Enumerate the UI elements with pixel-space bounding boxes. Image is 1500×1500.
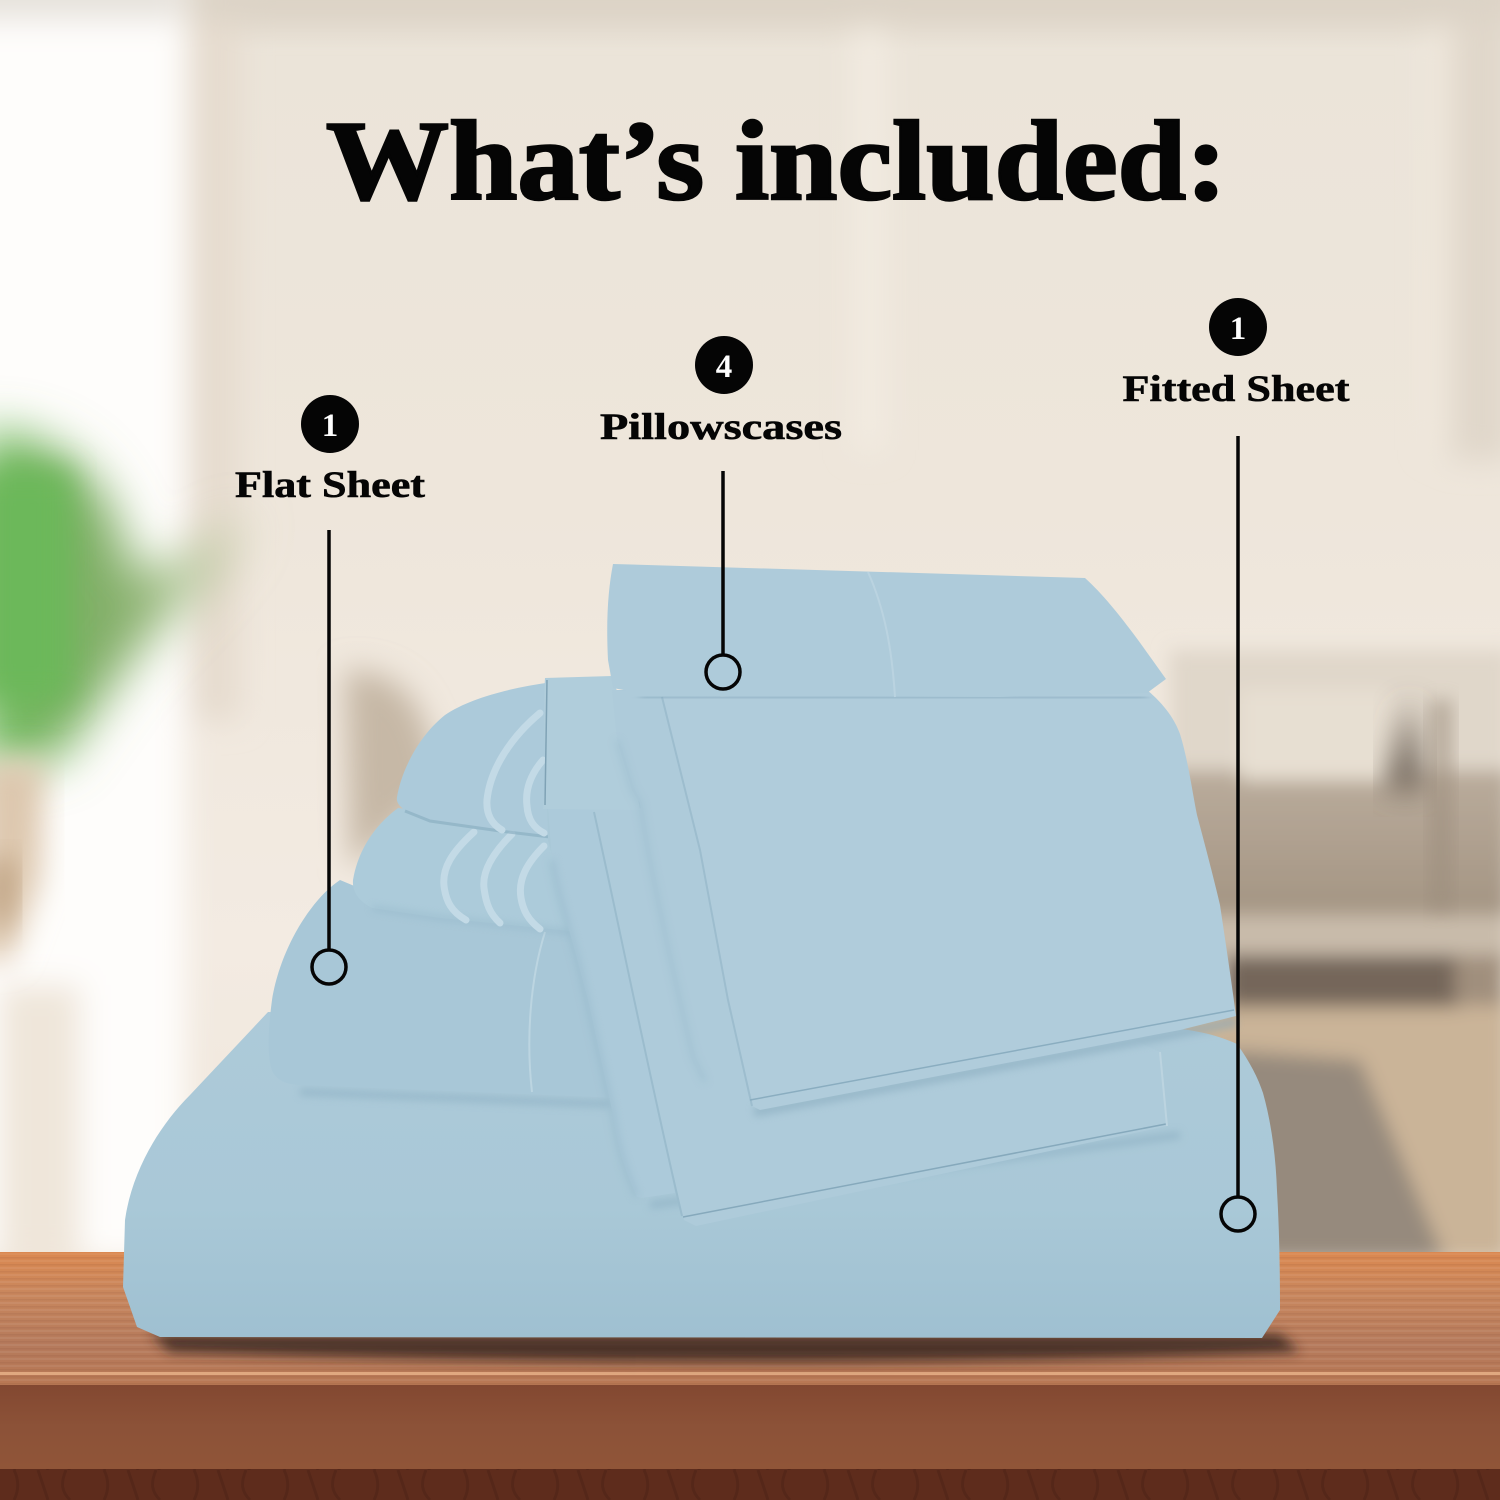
top pillowcase seam <box>868 572 895 697</box>
folded pillowcase: upper back strip <box>612 690 770 1082</box>
flat sheet seam <box>529 932 545 1092</box>
pillowcase roll: lower <box>353 808 580 932</box>
badge: 1: 1 <box>1230 311 1246 347</box>
top pillowcase shadow <box>640 697 1147 698</box>
title: What’s included: <box>326 99 1227 224</box>
sheet contact shadow <box>150 1334 1300 1362</box>
top pillowcase <box>607 564 1166 697</box>
badge: 1 <box>1209 298 1267 356</box>
table apron <box>0 1469 1500 1500</box>
badge: 4 <box>695 336 753 394</box>
table edge <box>0 1385 1500 1469</box>
blurred sofa right <box>1170 650 1500 1260</box>
bedding stack <box>123 564 1280 1338</box>
folded pillowcase: upper front <box>662 690 1236 1110</box>
badge: 1: 1 <box>322 408 338 444</box>
folded pillowcase: lower front <box>594 808 1167 1226</box>
callout: pillowcases <box>600 336 842 689</box>
badge: 1 <box>301 395 359 453</box>
label: pillowcases: Pillowscases <box>600 407 842 448</box>
badge: 4: 4 <box>716 349 732 385</box>
wooden table <box>0 1252 1500 1500</box>
callout: flat sheet <box>235 395 426 984</box>
pointer line: pillowcases <box>706 471 740 689</box>
stack filler behind folds <box>545 690 720 1190</box>
flat sheet <box>269 880 620 1098</box>
pillowcase roll: upper <box>397 682 560 837</box>
label: fitted sheet: Fitted Sheet <box>1122 369 1350 410</box>
folded pillowcase: upper front shadow <box>754 1022 1236 1112</box>
fitted sheet <box>123 1012 1280 1338</box>
label: flat sheet: Flat Sheet <box>235 465 426 506</box>
table top surface <box>0 1252 1500 1385</box>
folded pillowcase: back strip <box>548 808 675 1198</box>
folded tab <box>543 676 640 810</box>
pointer line: fitted sheet <box>1221 436 1255 1231</box>
blurred sofa left <box>345 670 440 870</box>
pointer line: flat sheet <box>312 530 346 984</box>
callout: fitted sheet <box>1122 298 1350 1231</box>
fitted sheet: soft shadows <box>300 1092 1180 1205</box>
blurred plant <box>0 430 250 960</box>
